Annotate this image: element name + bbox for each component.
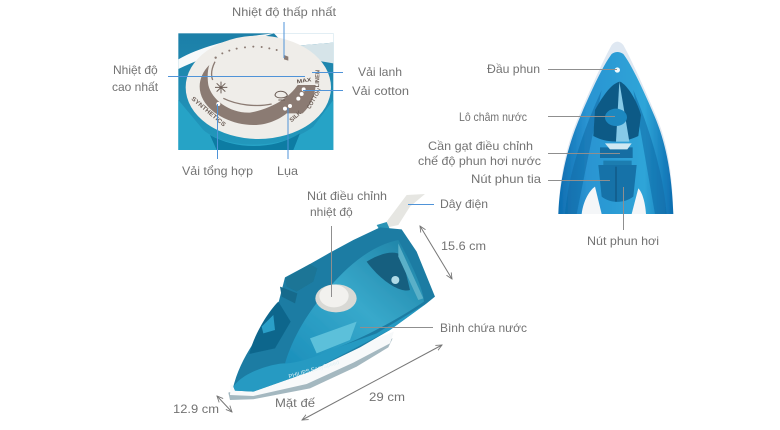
label: steam lever: Cần gạt điều chỉnh — [428, 139, 533, 153]
label: synthetics: Vải tổng hợp — [182, 164, 253, 178]
label: steam lever: chế độ phun hơi nước — [418, 154, 541, 168]
label: temperature knob: nhiệt độ — [310, 205, 353, 219]
brand text: PHILIPS EasySpeed — [288, 360, 340, 380]
label: soleplate: Mặt đế — [275, 396, 315, 410]
lever — [600, 147, 633, 158]
water tank — [285, 240, 424, 363]
panel: temperature dial photo: SYNTHETICS — [190, 96, 226, 128]
label: water inlet: Lô châm nước — [459, 110, 527, 124]
label: highest temperature: Nhiệt độ — [113, 63, 158, 77]
dial icons — [215, 82, 287, 100]
label: nozzle: Đầu phun — [487, 62, 540, 76]
callout lines for top view — [548, 70, 624, 230]
panel: temperature dial photo: COTTON — [307, 88, 323, 110]
arrow: height — [420, 226, 452, 279]
label: height: 15.6 cm — [441, 239, 486, 253]
panel: temperature dial photo: SILK — [289, 110, 304, 124]
dial dots — [214, 46, 278, 59]
label: length: 29 cm — [369, 390, 405, 404]
callout lines for side view — [332, 226, 433, 328]
label: silk: Lụa — [277, 164, 298, 178]
label: steam button: Nút phun hơi — [587, 234, 659, 248]
spray buttons — [598, 165, 637, 202]
label: highest temperature: cao nhất — [112, 80, 159, 94]
soleplate — [228, 338, 393, 400]
label: spray button: Nút phun tia — [471, 172, 541, 186]
label: temperature knob: Nút điều chỉnh — [307, 189, 387, 203]
arrow: width — [217, 396, 232, 412]
dial scale band — [200, 65, 316, 125]
label: cord: Dây điện — [440, 197, 488, 211]
label: cotton: Vải cotton — [352, 84, 409, 98]
panel: temperature dial photo: MAX — [296, 77, 312, 85]
temperature knob — [315, 284, 357, 312]
handle grip — [285, 264, 317, 292]
front cover — [249, 302, 291, 354]
cord guard — [383, 194, 425, 228]
panel: temperature dial photo: LINEN — [315, 70, 322, 87]
panel: temperature dial photo — [178, 33, 333, 150]
label: width: 12.9 cm — [173, 402, 219, 416]
body — [233, 227, 435, 392]
callout lines for dial — [168, 22, 343, 159]
arrow: length — [302, 345, 442, 420]
water cap — [593, 82, 641, 141]
label: lowest temperature: Nhiệt độ thấp nhất — [232, 5, 337, 19]
label: linen: Vải lanh — [358, 65, 402, 79]
illustration: iron side view — [228, 194, 435, 400]
label: tank: Bình chứa nước — [440, 321, 527, 335]
white base — [582, 187, 602, 214]
illustration: iron top view — [558, 42, 673, 214]
